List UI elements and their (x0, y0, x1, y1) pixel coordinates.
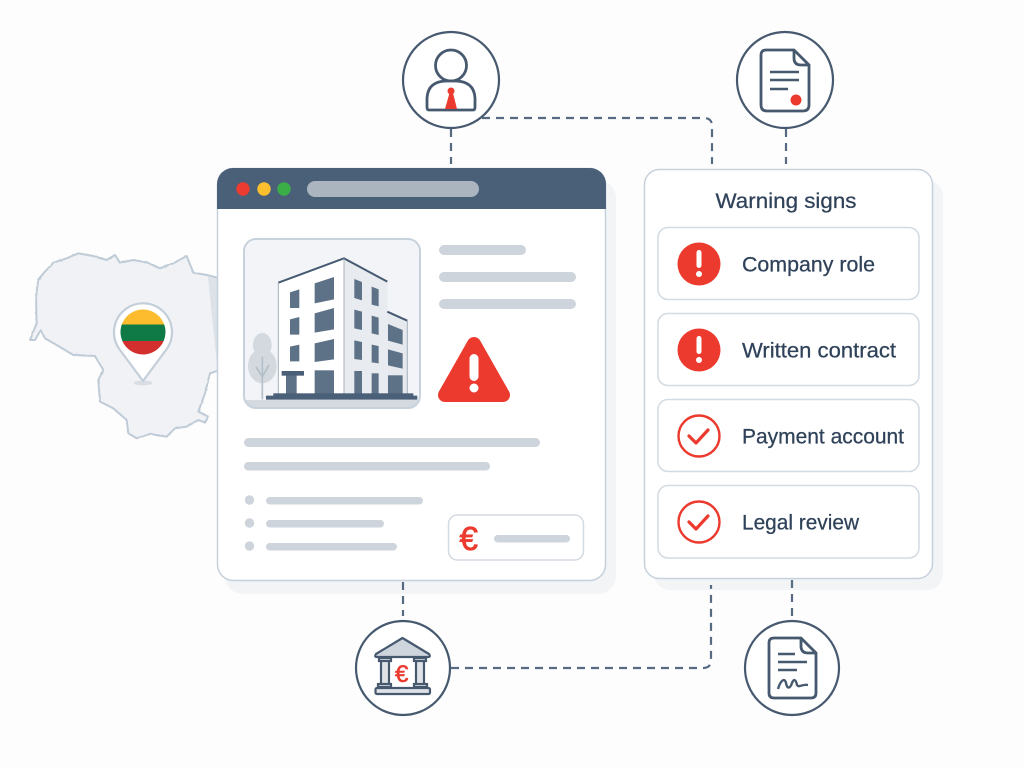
row: legal review (658, 486, 919, 558)
panel heading: Warning signs (716, 189, 856, 213)
warning signs panel (644, 170, 932, 578)
price box (448, 515, 584, 560)
map outline (30, 253, 220, 438)
row: written contract (658, 314, 919, 386)
panel shadows (225, 180, 943, 594)
tree (248, 333, 277, 399)
icon: bank with euro: € (395, 661, 409, 688)
row: legal review: Legal review (742, 510, 859, 534)
row: payment account (658, 400, 919, 472)
icon: person with tie (403, 32, 499, 128)
infographic (29, 30, 943, 716)
building (266, 258, 417, 400)
row: company role: Company role (742, 252, 875, 276)
icon: signed document (745, 621, 839, 715)
row: company role (658, 228, 919, 300)
placeholder text lines (244, 245, 576, 551)
row: written contract: Written contract (742, 338, 896, 362)
icon: bank with euro (356, 621, 450, 715)
warning triangle (445, 344, 503, 395)
browser window panel (217, 168, 606, 580)
location pin (114, 303, 172, 386)
map of Lithuania with pin (30, 253, 220, 438)
connector lines (403, 118, 792, 668)
browser title bar (217, 168, 606, 209)
icon: document with seal (737, 32, 833, 128)
flag (120, 309, 166, 356)
building image (244, 239, 420, 410)
row: payment account: Payment account (742, 424, 904, 448)
price box: € (460, 520, 478, 557)
